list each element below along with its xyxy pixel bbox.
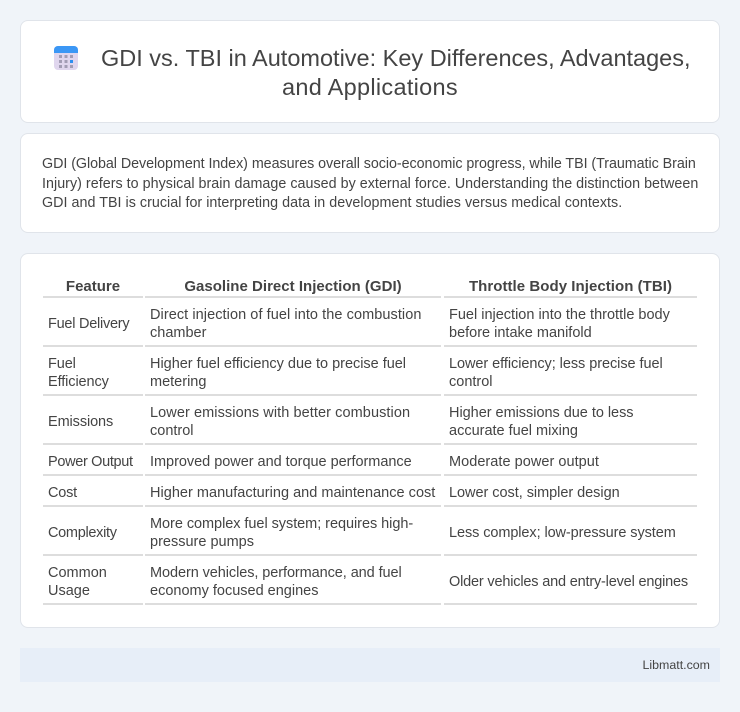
comparison table: Fuel injection into the throttle body [449, 307, 670, 323]
comparison table: Higher fuel efficiency due to precise fuel [150, 356, 406, 372]
comparison table: pressure pumps [150, 534, 254, 550]
row: Common Usage: Common [48, 565, 107, 581]
footer credit: Libmatt.com [643, 658, 710, 672]
comparison table: Lower efficiency; less precise fuel [449, 356, 663, 372]
intro text: Injury) refers to physical brain damage caused by external force. Understanding the distinction between [42, 176, 698, 192]
comparison table: More complex fuel system; requires high- [150, 516, 413, 532]
panel: title card [20, 20, 720, 123]
footer bar [20, 648, 720, 682]
intro text [42, 156, 698, 211]
comparison table: Higher emissions due to less [449, 405, 634, 421]
icon: calendar [54, 46, 78, 70]
comparison table: economy focused engines [150, 583, 318, 599]
comparison table: Lower emissions with better combustion [150, 405, 410, 421]
comparison table: control [449, 374, 493, 390]
row: Common Usage: Usage [48, 583, 90, 599]
row: Emissions: Emissions [48, 414, 113, 430]
comparison table: before intake manifold [449, 325, 592, 341]
title: and Applications [282, 74, 458, 100]
title [101, 45, 691, 100]
row: Complexity: Complexity [48, 525, 117, 541]
row: Fuel Efficiency: Efficiency [48, 374, 109, 390]
comparison table: Direct injection of fuel into the combustion [150, 307, 421, 323]
row: Fuel Efficiency [48, 356, 109, 390]
row: Power Output: Power Output [48, 454, 133, 470]
comparison table: Improved power and torque performance [150, 454, 412, 470]
intro text: GDI and TBI is crucial for interpreting data in development studies versus medical contexts. [42, 195, 622, 211]
comparison table: Modern vehicles, performance, and fuel [150, 565, 402, 581]
comparison table: Less complex; low-pressure system [449, 525, 676, 541]
comparison table: metering [150, 374, 206, 390]
comparison table: chamber [150, 325, 206, 341]
row: Fuel Efficiency: Fuel [48, 356, 76, 372]
comparison table: Moderate power output [449, 454, 599, 470]
panel: intro text card [20, 133, 720, 233]
row: Common Usage [48, 565, 107, 599]
title: GDI vs. TBI in Automotive: Key Differences, Advantages, [101, 45, 691, 71]
panel: comparison table card [20, 253, 720, 628]
row: Fuel Delivery: Fuel Delivery [48, 316, 129, 332]
header: Feature: Feature [66, 278, 120, 295]
comparison table: control [150, 423, 194, 439]
comparison table: Lower cost, simpler design [449, 485, 620, 501]
comparison table [43, 278, 697, 605]
comparison table: accurate fuel mixing [449, 423, 578, 439]
comparison table: Older vehicles and entry-level engines [449, 574, 688, 590]
intro text: GDI (Global Development Index) measures overall socio-economic progress, while TBI (Traumatic Brain [42, 156, 696, 172]
row: Cost: Cost [48, 485, 77, 501]
header: TBI: Throttle Body Injection (TBI) [469, 278, 672, 295]
header: GDI: Gasoline Direct Injection (GDI) [184, 278, 402, 295]
comparison table: Higher manufacturing and maintenance cost [150, 485, 435, 501]
